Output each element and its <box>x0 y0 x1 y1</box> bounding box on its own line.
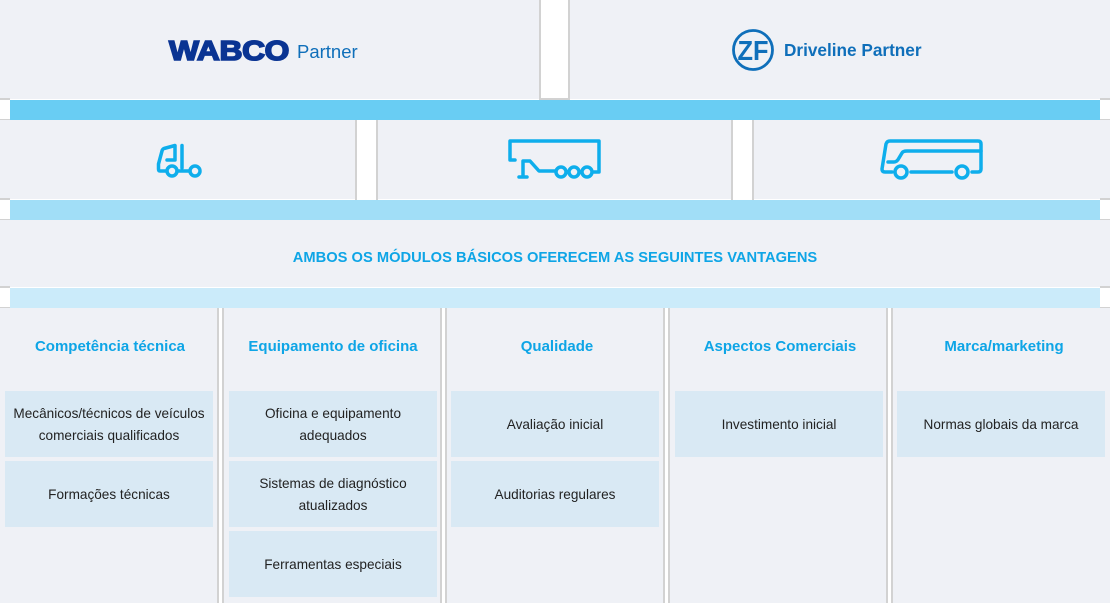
logo: WABCO: WABCO <box>169 35 289 66</box>
side band edge left 3 <box>0 286 10 309</box>
heading: Qualidade: Qualidade <box>521 338 593 355</box>
box <box>675 391 883 457</box>
logo text: Driveline Partner: Driveline Partner <box>784 40 922 60</box>
column: Competência técnica <box>0 308 218 603</box>
icon: truck <box>156 144 202 178</box>
column gap 4 <box>886 308 893 603</box>
heading: Competência técnica: Competência técnica <box>35 338 185 355</box>
box <box>229 461 437 527</box>
column: Aspectos Comerciais <box>669 308 887 603</box>
panel: ZF Driveline Partner <box>569 0 1110 99</box>
box: Mecânicos/técnicos de veículos <box>13 406 205 420</box>
side band edge right 3 <box>1100 286 1110 309</box>
side band edge right 2 <box>1100 198 1110 221</box>
logo: ZF: ZF <box>738 35 768 66</box>
box: comerciais qualificados <box>39 428 179 442</box>
box <box>451 461 659 527</box>
box: Investimento inicial <box>722 416 836 432</box>
panel: truck <box>0 120 356 199</box>
bar: blue band 2 <box>10 200 1100 220</box>
column gap 1 <box>217 308 224 603</box>
logo: ZF <box>732 29 774 71</box>
column: Equipamento de oficina <box>223 308 441 603</box>
box: adequados <box>299 428 367 442</box>
panel: trailer <box>377 120 732 199</box>
box <box>229 391 437 457</box>
box: Sistemas de diagnóstico <box>259 476 407 490</box>
box: Formações técnicas <box>48 486 170 502</box>
side band edge left 1 <box>0 98 10 121</box>
box: atualizados <box>299 498 367 512</box>
icon: bus <box>880 139 983 180</box>
panel: bus <box>753 120 1110 199</box>
box <box>5 461 213 527</box>
icon: trailer <box>508 139 601 179</box>
side band edge right 1 <box>1100 98 1110 121</box>
heading: Marca/marketing: Marca/marketing <box>944 338 1064 355</box>
bar: blue band 3 <box>10 288 1100 308</box>
box: Avaliação inicial <box>507 416 603 432</box>
column: Marca/marketing <box>892 308 1110 603</box>
box <box>897 391 1105 457</box>
box <box>451 391 659 457</box>
divider gap <box>539 0 570 100</box>
box: Auditorias regulares <box>495 486 615 502</box>
heading: Aspectos Comerciais: Aspectos Comerciais <box>704 338 856 355</box>
box <box>5 391 213 457</box>
panel: banner <box>0 220 1110 287</box>
box: Oficina e equipamento <box>265 406 401 420</box>
box: Normas globais da marca <box>924 416 1078 432</box>
box: Ferramentas especiais <box>264 556 402 572</box>
divider row 2 left <box>355 120 378 200</box>
divider row 2 right <box>731 120 754 200</box>
column gap 2 <box>440 308 447 603</box>
side band edge left 2 <box>0 198 10 221</box>
box <box>229 531 437 597</box>
panel: banner: AMBOS OS MÓDULOS BÁSICOS OFERECEM AS SEGUINTES VANTAGENS <box>293 250 817 266</box>
heading: Equipamento de oficina: Equipamento de oficina <box>248 338 418 355</box>
logo text: Partner: Partner <box>297 41 358 62</box>
column gap 3 <box>663 308 670 603</box>
panel: WABCO Partner <box>0 0 540 99</box>
bar: blue band 1 <box>10 100 1100 120</box>
column: Qualidade <box>446 308 664 603</box>
